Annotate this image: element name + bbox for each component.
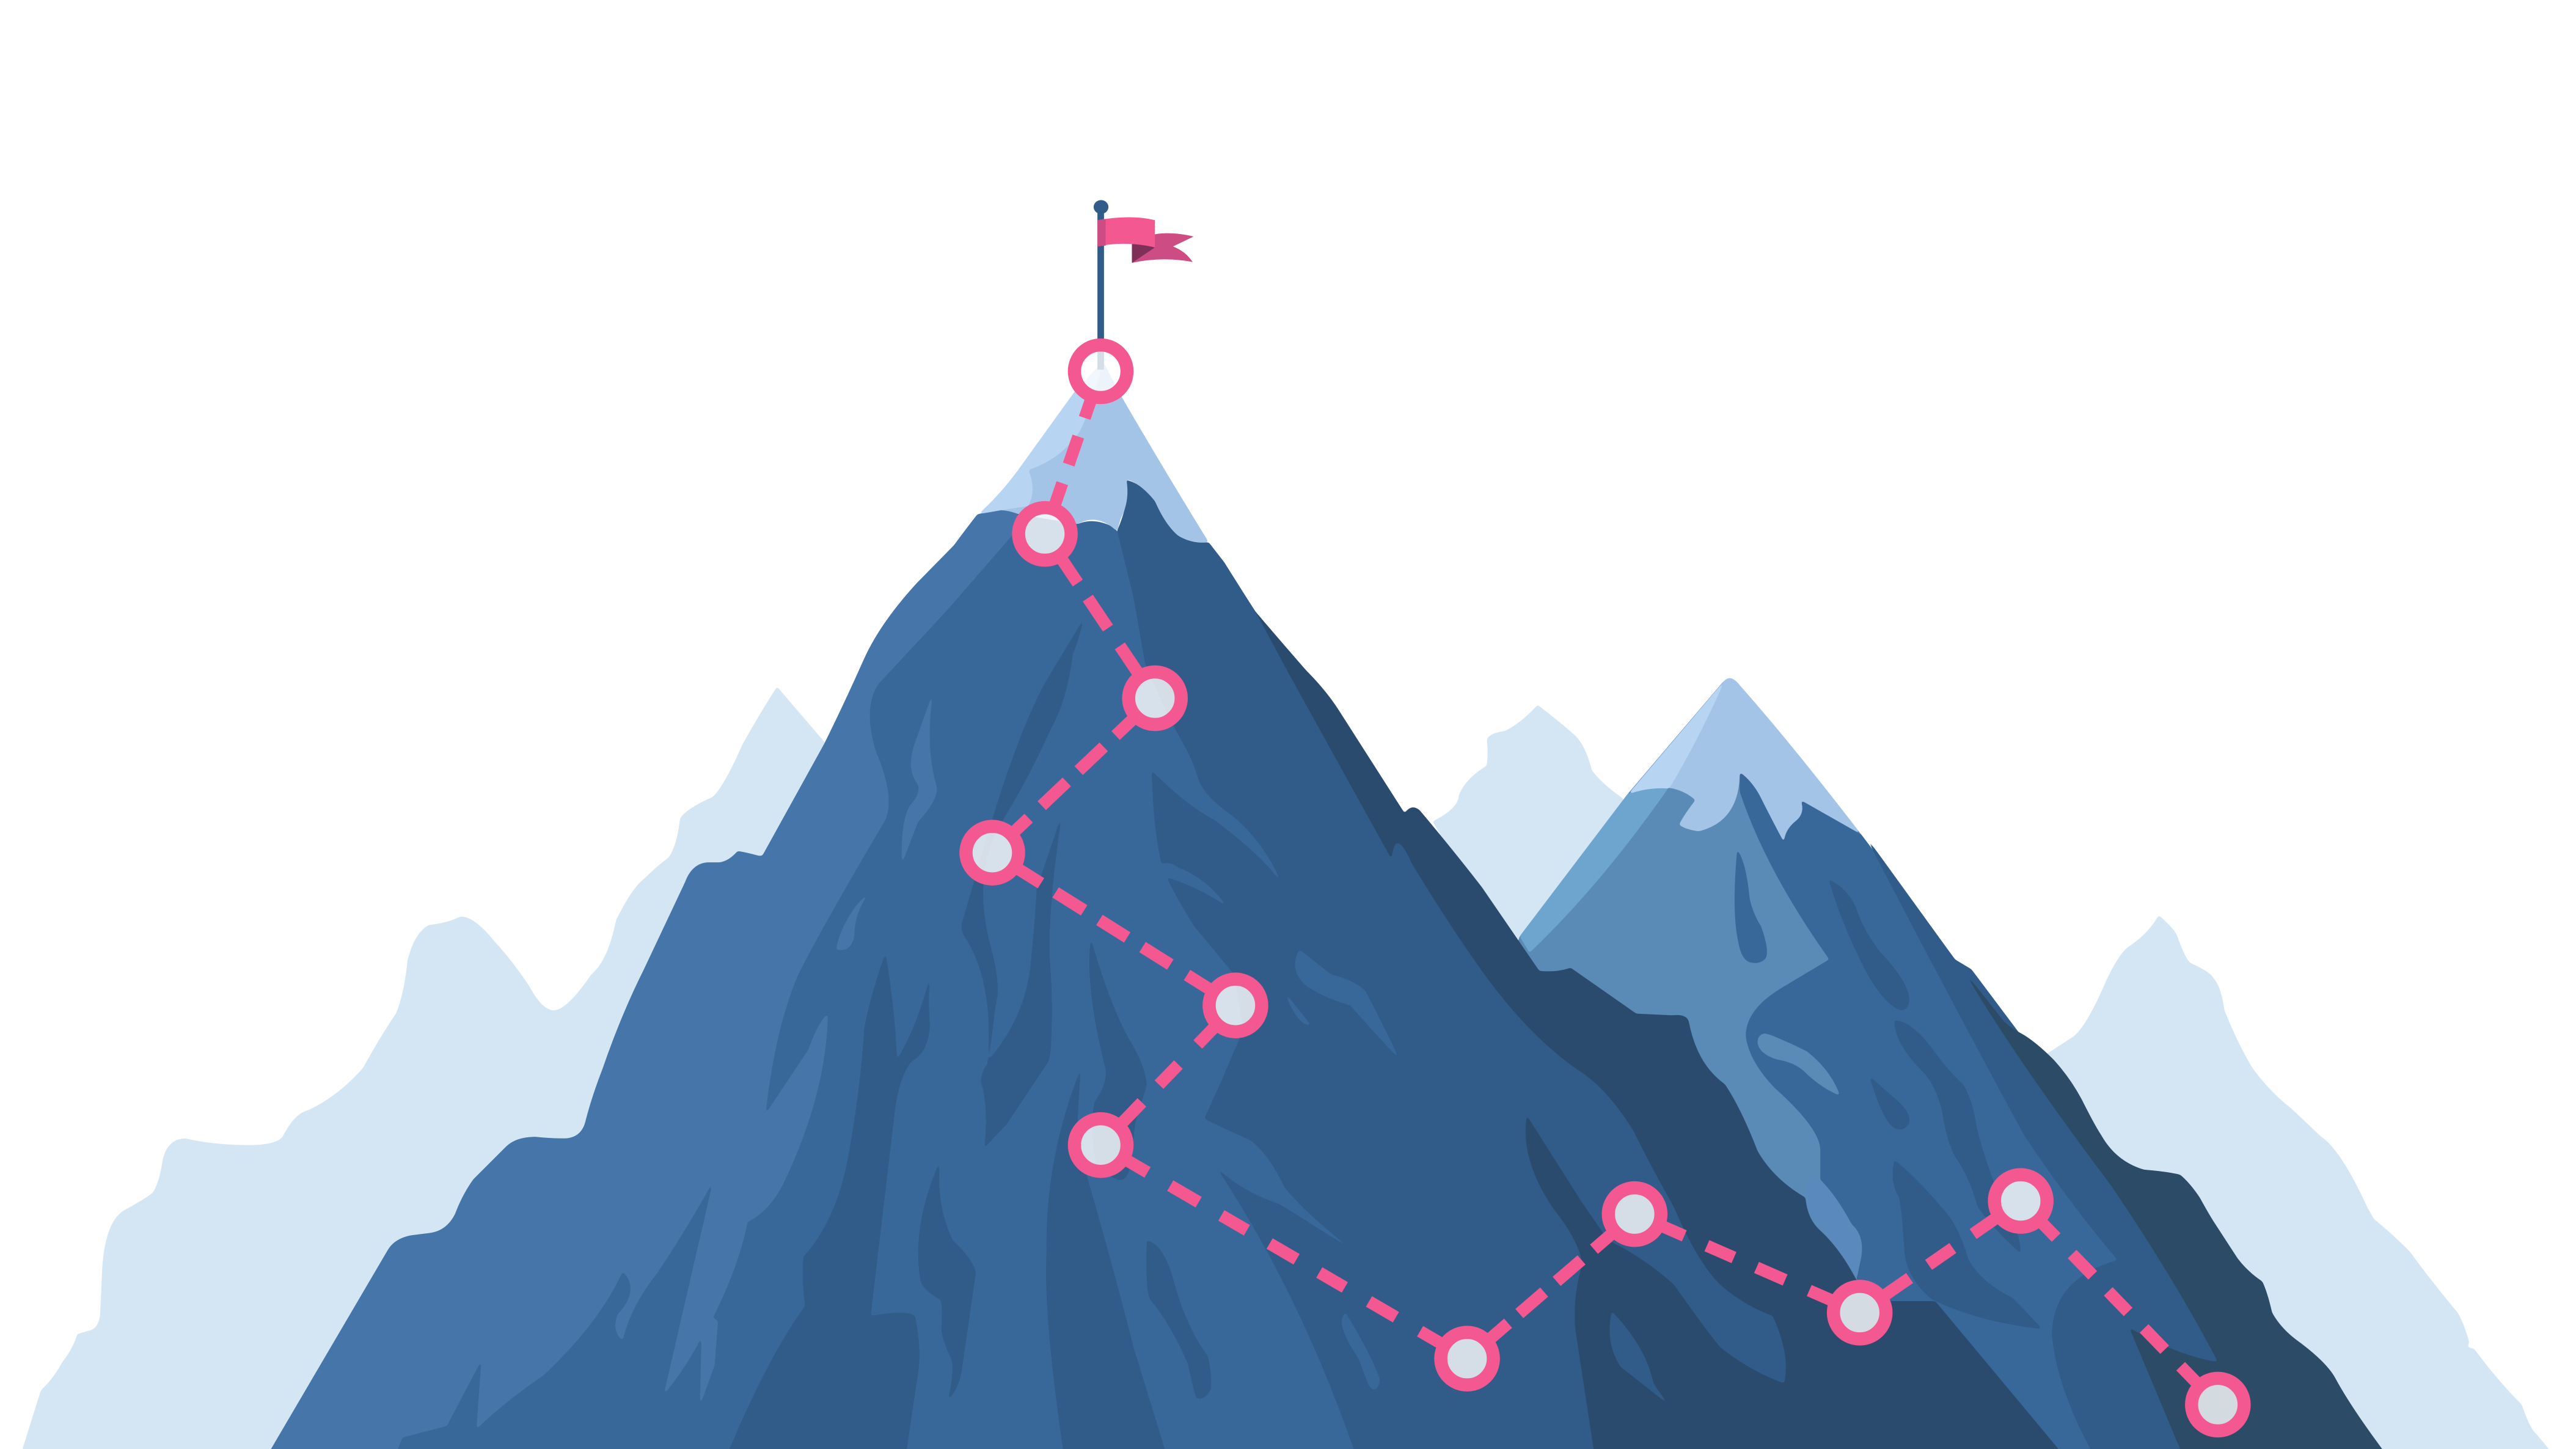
second peak: base face: [1479, 678, 1972, 1315]
waypoint 5: [1074, 1119, 1127, 1172]
route leg 4: [992, 853, 1235, 1005]
route: waypoint markers: [966, 345, 2244, 1431]
main peak: mid-blue flecks on shadow: [1285, 950, 1400, 1390]
second peak: shaded right face: [1740, 772, 2399, 1449]
waypoint 7: [966, 826, 1019, 879]
waypoint 2: [1834, 1286, 1886, 1339]
waypoint 1: [1994, 1175, 2047, 1227]
flag fold shadow: [1132, 244, 1155, 263]
route leg 1: [1045, 372, 1100, 534]
pole finial: [1094, 200, 1108, 214]
rock streak 2: [1894, 1020, 2021, 1253]
rock gully: large left: [720, 953, 935, 1449]
route leg 2: [1045, 534, 1155, 698]
route leg 10: [2021, 1201, 2218, 1404]
waypoint 6: [1209, 979, 1262, 1032]
waypoint: start: [2192, 1378, 2244, 1431]
main peak: mid-blue face: [255, 509, 1391, 1449]
panel: second peak: [1479, 678, 2399, 1449]
waypoint 8: [1129, 672, 1181, 725]
main peak: shadowed right face: [1052, 480, 1786, 1449]
route leg 5: [1100, 1005, 1235, 1145]
route leg 3: [992, 698, 1155, 853]
main peak: lit left slope: [255, 509, 1019, 1449]
fleck: long streak: [1295, 950, 1400, 1060]
rock streak 3: [1870, 1076, 1909, 1129]
fleck: small wedge: [1285, 992, 1311, 1025]
waypoint 3: [1608, 1188, 1661, 1241]
route leg 7: [1467, 1214, 1634, 1359]
main peak: rock gullies: [720, 618, 1211, 1449]
main peak: snow cap: [978, 361, 1209, 543]
main peak: dark gully: [1526, 1115, 1626, 1273]
rock gully: centre strip: [1046, 1068, 1169, 1449]
second peak: snow highlight: [1628, 680, 1725, 794]
second peak: lit left band: [1520, 787, 1669, 953]
route leg 6: [1100, 1145, 1467, 1359]
distant range: middle: [1433, 705, 1643, 986]
waypoint: summit: [1074, 345, 1127, 398]
main peak: darkest ridge and base: [986, 542, 2080, 1449]
panel: main peak: [255, 361, 2080, 1449]
rock streak 1: [1829, 879, 1909, 1010]
second peak: rock streaks: [1829, 879, 2042, 1329]
background: pale distant ranges: [16, 687, 2560, 1449]
route leg 9: [1860, 1201, 2021, 1313]
route leg 8: [1634, 1214, 1860, 1313]
distant range: left: [16, 687, 920, 1449]
second peak: shadow band along ridge: [1865, 835, 2218, 1449]
main peak: gully island: [1610, 1311, 1670, 1406]
rock gully: upper branching: [961, 618, 1085, 1148]
rock streak 4: [1892, 1160, 2042, 1329]
flag pole: [1097, 207, 1104, 370]
route: dashed climbing path: [992, 372, 2218, 1404]
second peak: meltwater drop: [1735, 849, 1767, 963]
flag back tail: [1132, 233, 1193, 263]
main peak: pale fleck: [836, 893, 869, 950]
main peak: pale streak left: [902, 692, 937, 864]
main peak: snow highlight: [978, 361, 1103, 514]
second peak: blue stream: [1806, 1179, 1862, 1280]
flag front banner: [1097, 217, 1155, 248]
second peak: darkest ridge: [1955, 959, 2399, 1449]
distant range: right: [2046, 915, 2560, 1449]
second peak: snow cap: [1628, 678, 1861, 843]
waypoint 9: [1019, 508, 1071, 560]
rock gully: lower centre: [1146, 1241, 1211, 1399]
flag sleeve: [1097, 219, 1106, 246]
icon: summit flag: [1094, 200, 1193, 370]
rock gully: small centre: [918, 1162, 976, 1399]
fleck: lower streak: [1342, 1313, 1380, 1390]
second peak: pale streak: [1758, 1033, 1840, 1096]
waypoint 4: [1441, 1332, 1493, 1385]
rock gully: upper centre: [1089, 938, 1147, 1180]
